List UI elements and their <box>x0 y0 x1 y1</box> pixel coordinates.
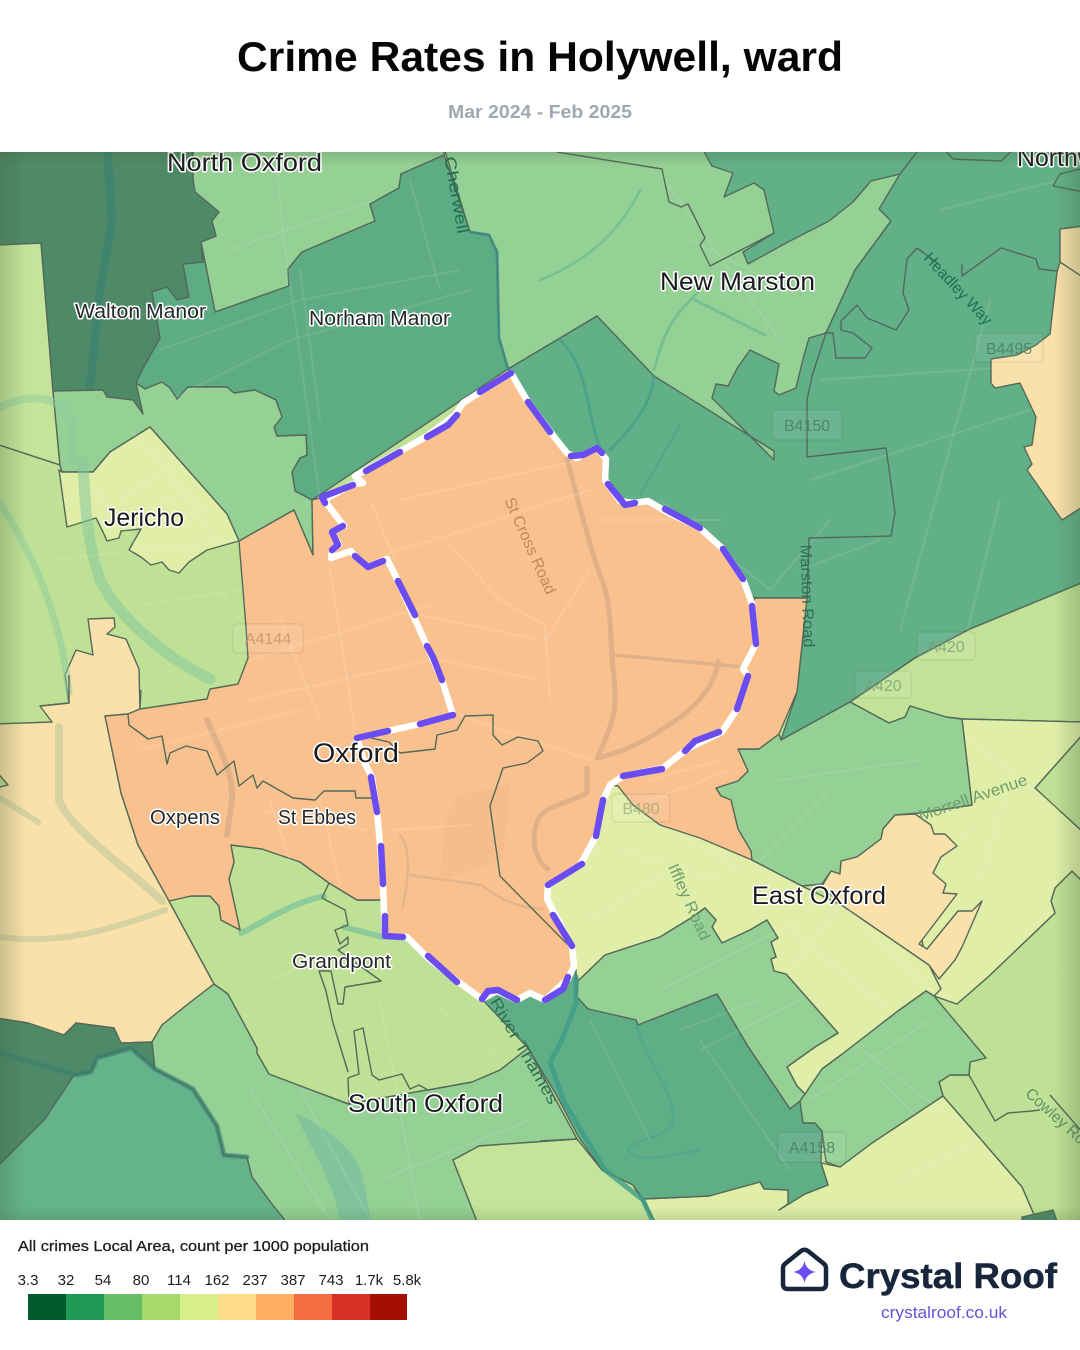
region: Thames-side mid-green <box>482 970 828 1210</box>
road and river labels: Morrell Avenue <box>917 772 1030 825</box>
region: far east pale orange <box>991 226 1080 520</box>
road and river labels: Iffley Road <box>664 861 713 943</box>
road shields <box>233 333 1043 1162</box>
place labels: Jericho <box>104 504 184 532</box>
legend value labels: 237 <box>242 1272 268 1289</box>
place labels: Grandpont <box>292 951 391 973</box>
place labels: East Oxford <box>752 882 886 910</box>
region: north light green <box>193 148 444 312</box>
legend value labels: 32 <box>58 1272 74 1289</box>
region: East Oxford mid-light green <box>716 702 972 886</box>
road and river labels: River Thames <box>486 995 561 1107</box>
road shields: B480 <box>622 801 660 818</box>
road and river labels: Headley Way <box>920 250 995 329</box>
road and river labels <box>440 155 1080 1159</box>
lake south of Oxford <box>296 1113 372 1224</box>
legend value labels: 80 <box>133 1272 149 1289</box>
road shields: A4158 <box>789 1140 835 1157</box>
waterways and railway bands <box>0 148 765 1224</box>
map edge vignette <box>0 152 1080 1220</box>
region: south-west dark green <box>0 1018 155 1168</box>
region: Iffley pale green <box>547 785 941 1094</box>
place labels: Walton Manor <box>75 301 206 323</box>
place labels: North Oxford <box>167 149 322 177</box>
place labels <box>75 144 1080 1118</box>
inner ward borders in orange area <box>128 714 570 947</box>
region: Iffley Fields mid-light green <box>576 908 838 1109</box>
legend value labels: 162 <box>204 1272 230 1289</box>
legend value labels: 54 <box>95 1272 111 1289</box>
logo: Crystal Roof <box>783 1250 1057 1322</box>
region: small dark corner <box>1022 1210 1058 1224</box>
place labels: Oxford <box>313 738 399 768</box>
city centre waterways and grounds <box>207 459 743 909</box>
region: South Oxford mid-light green <box>152 984 577 1224</box>
region: south pale green <box>453 1139 656 1224</box>
region: east light green corner <box>1035 733 1080 833</box>
place labels: Norham Manor <box>309 308 450 330</box>
place labels: Oxpens <box>150 807 220 829</box>
road shields: A420 <box>864 678 902 695</box>
choropleth map <box>0 144 1080 1220</box>
legend value labels: 3.3 <box>18 1272 38 1289</box>
Holywell ward boundary <box>322 373 756 1000</box>
road and river labels: Marston Road <box>796 544 817 648</box>
region: Jericho pale green <box>59 427 239 573</box>
region: Cowley mid-light green <box>800 991 986 1167</box>
legend value labels: 743 <box>318 1272 344 1289</box>
region: Norham Manor mid-green <box>136 155 508 500</box>
boundary: white casing <box>324 373 756 1000</box>
legend value labels: 387 <box>280 1272 306 1289</box>
legend <box>18 1238 422 1320</box>
region: Walton Manor dark green <box>0 148 219 414</box>
road and river labels: Cherwell <box>440 155 471 235</box>
website url: crystalroof.co.uk <box>881 1304 1008 1322</box>
minor streets <box>50 152 1070 1220</box>
road shields: B4150 <box>784 418 830 435</box>
inner borders <box>0 148 1080 1141</box>
region: south-west meadow mid-green <box>0 1048 288 1224</box>
legend value labels: 114 <box>167 1272 191 1289</box>
region: south pale green band <box>643 1096 1038 1224</box>
road shields: B4495 <box>986 341 1032 358</box>
region: left column light green <box>0 243 60 465</box>
place labels: New Marston <box>660 268 815 296</box>
title: Crime Rates in Holywell, ward <box>237 33 843 80</box>
road and river labels: St Cross Road <box>501 495 558 597</box>
region: A420 light green <box>850 582 1080 723</box>
region: eastern mid-green <box>508 148 1080 740</box>
icon: house with star <box>783 1250 826 1289</box>
region: north-east mid-green <box>702 148 920 264</box>
region: Morrell Avenue pale green <box>895 719 1080 1004</box>
region: Grandpont light green <box>169 845 528 1104</box>
legend value labels <box>18 1272 422 1289</box>
Holywell and city centre orange area <box>105 373 807 1000</box>
region: Marston light green <box>444 148 920 460</box>
legend title: All crimes Local Area, count per 1000 population <box>18 1238 369 1255</box>
place labels: St Ebbes <box>278 807 356 829</box>
region: small west green sliver <box>0 771 8 788</box>
Holywell grounds shading <box>440 785 510 880</box>
legend value labels: 5.8k <box>393 1272 422 1289</box>
region: west pale orange and station <box>0 618 214 1043</box>
road shields: A420 <box>927 639 965 656</box>
legend value labels: 1.7k <box>355 1272 384 1289</box>
road shields: A4144 <box>245 631 291 648</box>
boundary: purple dashes <box>322 373 756 1000</box>
city streets <box>140 460 730 885</box>
region: mid-light green north of Jericho <box>53 382 313 555</box>
logo wordmark: Crystal Roof <box>839 1257 1057 1296</box>
legend colour scale <box>28 1294 407 1320</box>
region: east pale orange <box>822 814 982 979</box>
subtitle: date range: Mar 2024 - Feb 2025 <box>448 102 632 122</box>
place labels: South Oxford <box>348 1090 503 1118</box>
region: south-east light green <box>926 871 1080 1224</box>
